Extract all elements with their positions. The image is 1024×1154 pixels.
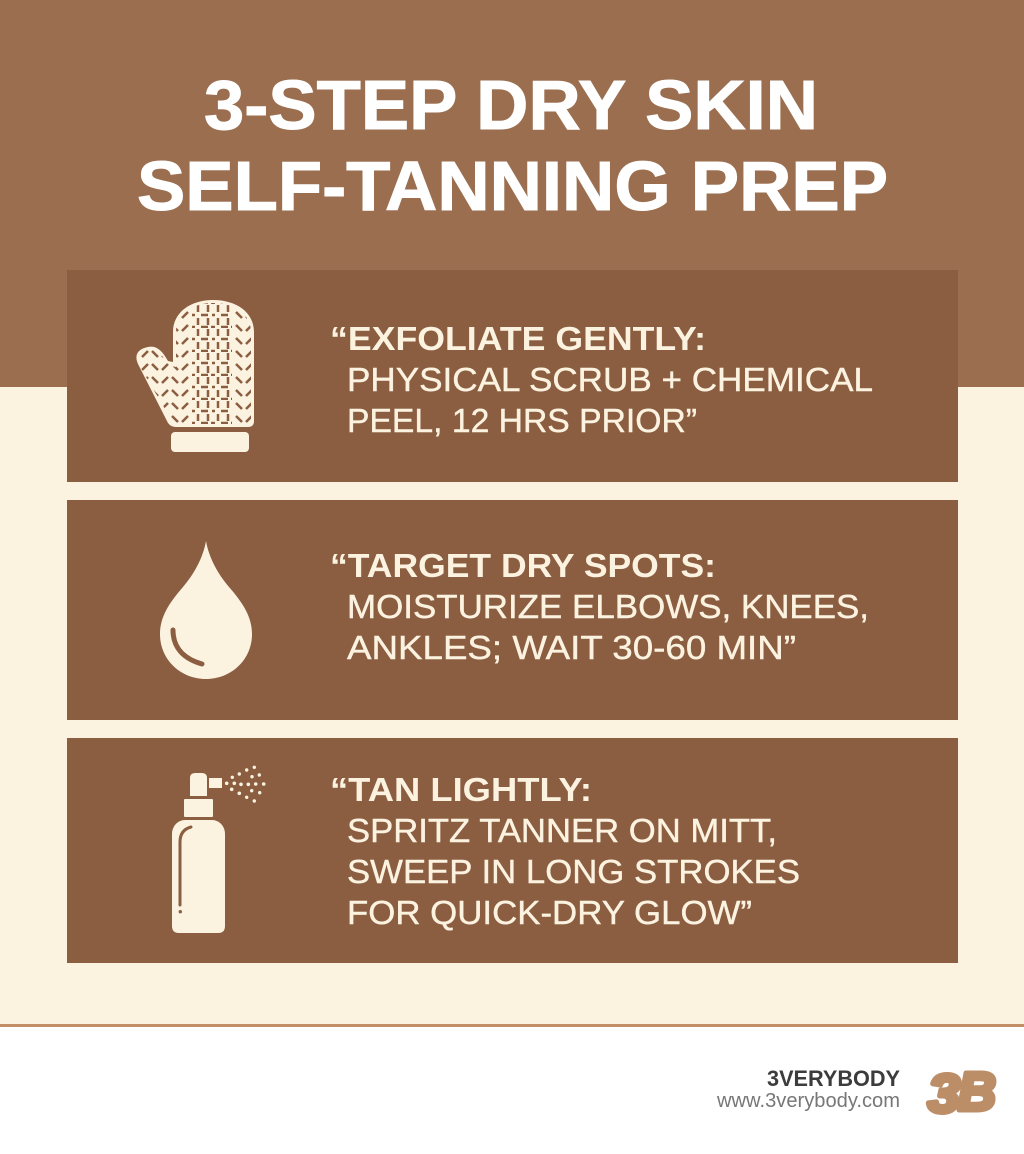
footer brand text: www.3verybody.com <box>716 1090 900 1112</box>
icon: water drop <box>160 541 252 679</box>
text: step 1 <box>330 320 873 439</box>
title: 3-STEP DRY SKIN <box>204 66 818 144</box>
text: step 1: PHYSICAL SCRUB + CHEMICAL <box>347 361 873 398</box>
background: tan header band <box>0 0 1024 387</box>
icon: exfoliating mitt <box>136 300 254 452</box>
panel: step 2 target dry spots <box>67 500 958 720</box>
background: cream section <box>0 387 1024 1024</box>
panel: step 3 tan lightly <box>67 738 958 963</box>
logo: 3B: B <box>958 1062 996 1122</box>
text: step 1: PEEL, 12 HRS PRIOR” <box>347 402 697 439</box>
icon: spray bottle <box>172 766 266 933</box>
footer brand text: 3VERYBODY <box>767 1066 900 1091</box>
text: step 2: ANKLES; WAIT 30-60 MIN” <box>347 629 796 666</box>
text: step 2 <box>330 547 869 666</box>
text: step 2: MOISTURIZE ELBOWS, KNEES, <box>347 588 869 625</box>
text: step 3: SPRITZ TANNER ON MITT, <box>347 812 777 849</box>
title <box>137 66 888 225</box>
logo: 3B: 3 <box>928 1064 960 1124</box>
logo: 3B <box>928 1062 996 1124</box>
title: SELF-TANNING PREP <box>137 147 888 225</box>
text: step 3 <box>330 771 800 931</box>
text: step 2: “TARGET DRY SPOTS: <box>330 547 716 584</box>
text: step 3: “TAN LIGHTLY: <box>330 771 592 808</box>
footer brand text <box>716 1066 900 1112</box>
footer rule <box>0 1024 1024 1027</box>
text: step 1: “EXFOLIATE GENTLY: <box>330 320 706 357</box>
panel: step 1 exfoliate <box>67 270 958 482</box>
text: step 3: SWEEP IN LONG STROKES <box>347 853 800 890</box>
text: step 3: FOR QUICK-DRY GLOW” <box>347 894 752 931</box>
